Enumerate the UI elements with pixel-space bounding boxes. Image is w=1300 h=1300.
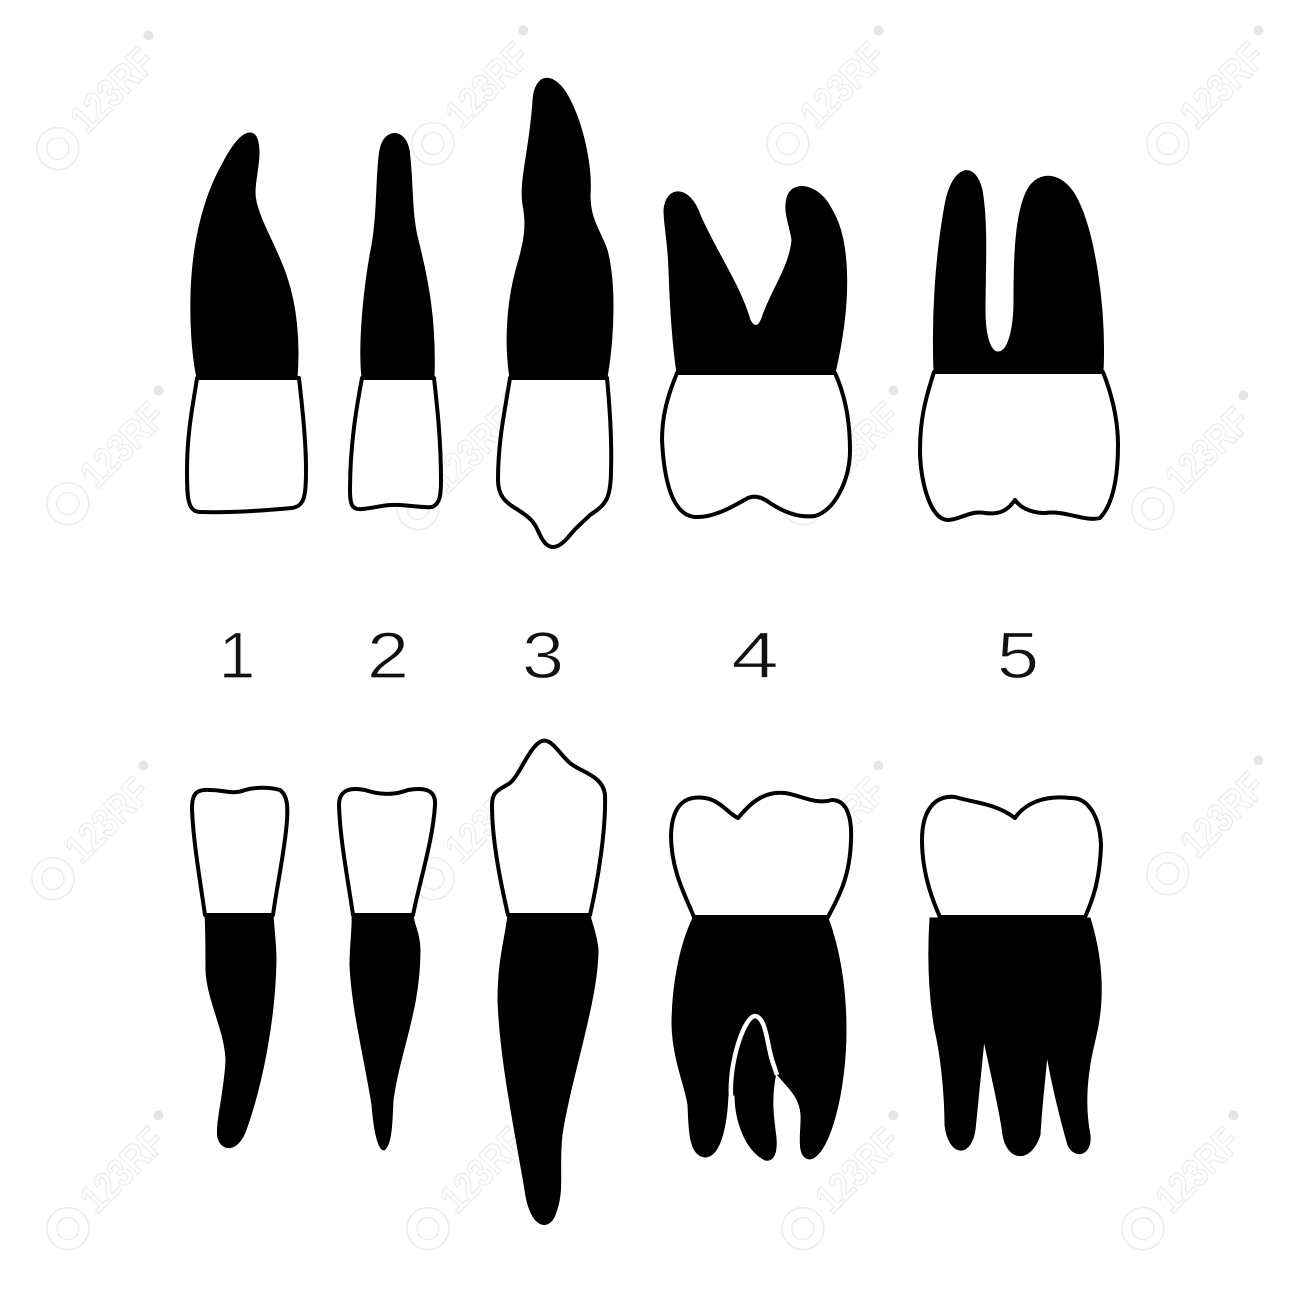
watermarks: 123RF xyxy=(1172,765,1274,866)
watermarks: 123RF xyxy=(792,35,894,136)
watermarks: 123RF xyxy=(62,40,164,141)
watermarks: 123RF xyxy=(57,770,159,871)
tooth numbers xyxy=(219,618,1039,693)
upper tooth 5 xyxy=(920,171,1118,520)
upper tooth 2 xyxy=(350,134,441,509)
lower tooth 4 xyxy=(671,793,851,1160)
tooth numbers: 4 xyxy=(731,619,779,693)
watermarks: 123RF xyxy=(792,770,894,871)
tooth numbers: 3 xyxy=(522,620,564,693)
lower tooth 5 xyxy=(922,797,1101,1156)
watermarks: 123RF xyxy=(807,1120,909,1221)
watermarks: 123RF xyxy=(1147,1120,1249,1221)
watermarks: 123RF xyxy=(807,395,909,496)
watermarks: 123RF xyxy=(72,395,174,496)
lower tooth 2 xyxy=(339,789,435,1150)
upper tooth 1 xyxy=(187,133,306,512)
watermarks: 123RF xyxy=(437,35,539,136)
tooth numbers: 2 xyxy=(367,620,409,693)
watermarks: 123RF xyxy=(1172,35,1274,136)
tooth numbers: 1 xyxy=(219,618,255,692)
watermarks: 123RF xyxy=(72,1120,174,1221)
watermarks: 123RF xyxy=(1157,400,1259,501)
watermarks: 123RF xyxy=(432,1120,534,1221)
watermarks: 123RF xyxy=(437,770,539,871)
watermarks: 123RF xyxy=(422,400,524,501)
lower tooth 1 xyxy=(192,788,287,1148)
upper tooth 3 xyxy=(498,78,613,547)
upper tooth 4 xyxy=(662,187,850,517)
lower tooth 3 xyxy=(492,741,605,1225)
tooth numbers: 5 xyxy=(997,620,1039,693)
